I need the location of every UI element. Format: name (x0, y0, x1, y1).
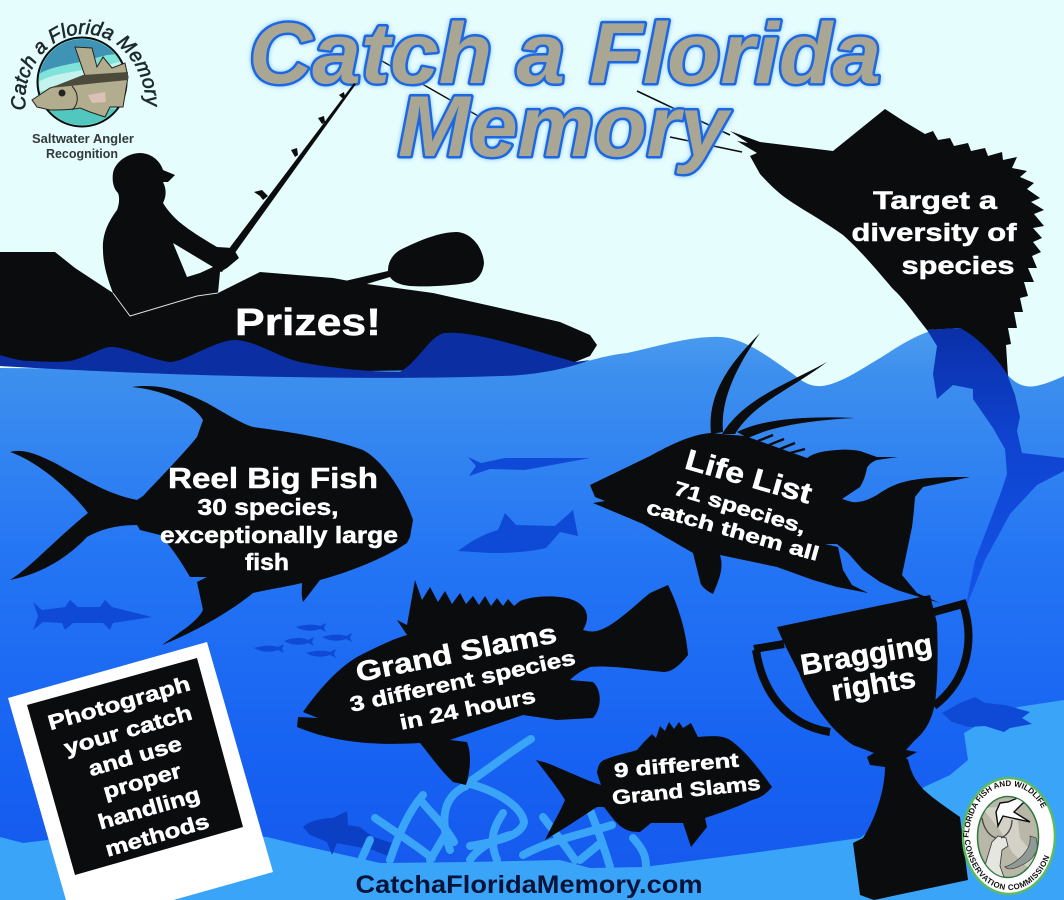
water (0, 328, 1064, 900)
polaroid text: handling (96, 783, 203, 834)
fishing line and bill lines behind title (375, 57, 742, 152)
background fish (33, 457, 1032, 857)
seal artwork (982, 798, 1038, 877)
needlefish (468, 457, 590, 476)
kayak with angler (0, 83, 597, 378)
Reel Big Fish text: fish (245, 549, 289, 575)
logo subtitle (32, 132, 134, 161)
bragging rights text (798, 628, 935, 708)
bragging rights text: rights (829, 662, 918, 708)
seal bottom text: CONSERVATION COMMISSION (964, 840, 1050, 890)
polaroid text: Photograph (45, 672, 193, 735)
trout (1005, 836, 1037, 869)
FWC seal (962, 776, 1056, 896)
bragging rights text: Bragging (798, 628, 935, 682)
seal top text: FLORIDA FISH AND WILDLIFE (963, 780, 1047, 838)
deer (985, 836, 1008, 877)
Grand Slams text (348, 617, 578, 735)
fish: Life List (590, 333, 970, 603)
polaroid photo (8, 642, 273, 900)
polaroid text: proper (101, 760, 184, 804)
left handle (754, 644, 830, 732)
fishing rod (216, 83, 356, 272)
fish: 9 different Grand Slams (536, 722, 772, 847)
logo: Catch a Florida Memory (10, 19, 158, 161)
title: Memory (398, 79, 732, 175)
trophy (754, 595, 968, 900)
school of small fish (254, 623, 352, 658)
kite bird (995, 798, 1030, 828)
barracuda (33, 600, 152, 630)
fish: Reel Big Fish (10, 386, 413, 645)
polaroid text: and use (86, 732, 185, 781)
9 different text: 9 different (613, 750, 740, 782)
sailfish label (852, 187, 1017, 280)
9 different text (611, 750, 762, 810)
Life List text: Life List (682, 444, 816, 511)
Grand Slams text: in 24 hours (398, 685, 538, 735)
logo subtitle: Saltwater Angler (32, 132, 134, 146)
reef fish right (942, 697, 1032, 732)
sailfish body above water (730, 109, 1044, 376)
rod guides (254, 92, 345, 200)
paddle (345, 232, 484, 286)
kayak hull (0, 252, 597, 372)
sailfish label: diversity of (852, 219, 1017, 247)
seat outline (113, 293, 218, 316)
Life List text: 71 species, (671, 478, 808, 539)
comb of dorsal rays (747, 431, 805, 453)
Life List text (644, 444, 821, 566)
sailfish (730, 109, 1064, 610)
reef fish bottom left (303, 811, 392, 857)
long dorsal filaments (711, 333, 855, 438)
sailfish tail under water (927, 328, 1064, 610)
angler (103, 153, 239, 317)
sandy sea floor (0, 700, 1064, 900)
9 different text: Grand Slams (611, 773, 762, 810)
right handle (934, 604, 968, 706)
logo badge with snook (32, 38, 130, 130)
Grand Slams text: Grand Slams (353, 617, 559, 688)
catfish (458, 510, 578, 553)
sailfish label: species (902, 252, 1014, 280)
website URL: CatchaFloridaMemory.com (356, 871, 702, 899)
Reel Big Fish text: exceptionally large (160, 522, 398, 548)
logo subtitle: Recognition (46, 147, 118, 161)
dark water over kayak (0, 333, 590, 378)
fish: Grand Slams (297, 580, 688, 785)
seagrass (362, 739, 646, 867)
Reel Big Fish text (160, 463, 398, 575)
title: Catch a Florida (249, 6, 881, 102)
Grand Slams text: 3 different species (348, 646, 578, 717)
Reel Big Fish text: 30 species, (198, 494, 338, 520)
polaroid text: methods (103, 810, 212, 862)
title (249, 6, 881, 175)
polaroid text (45, 672, 212, 862)
Reel Big Fish text: Reel Big Fish (168, 463, 378, 495)
logo arc text: Catch a Florida Memory (10, 19, 158, 110)
gap between arm and torso (173, 243, 213, 277)
hogfish body (590, 433, 970, 603)
cup and base (777, 595, 968, 900)
polaroid text: your catch (62, 702, 195, 760)
Life List text: catch them all (644, 497, 821, 566)
sailfish label: Target a (873, 187, 998, 215)
prizes label: Prizes! (235, 302, 381, 344)
snook fish (32, 47, 128, 117)
